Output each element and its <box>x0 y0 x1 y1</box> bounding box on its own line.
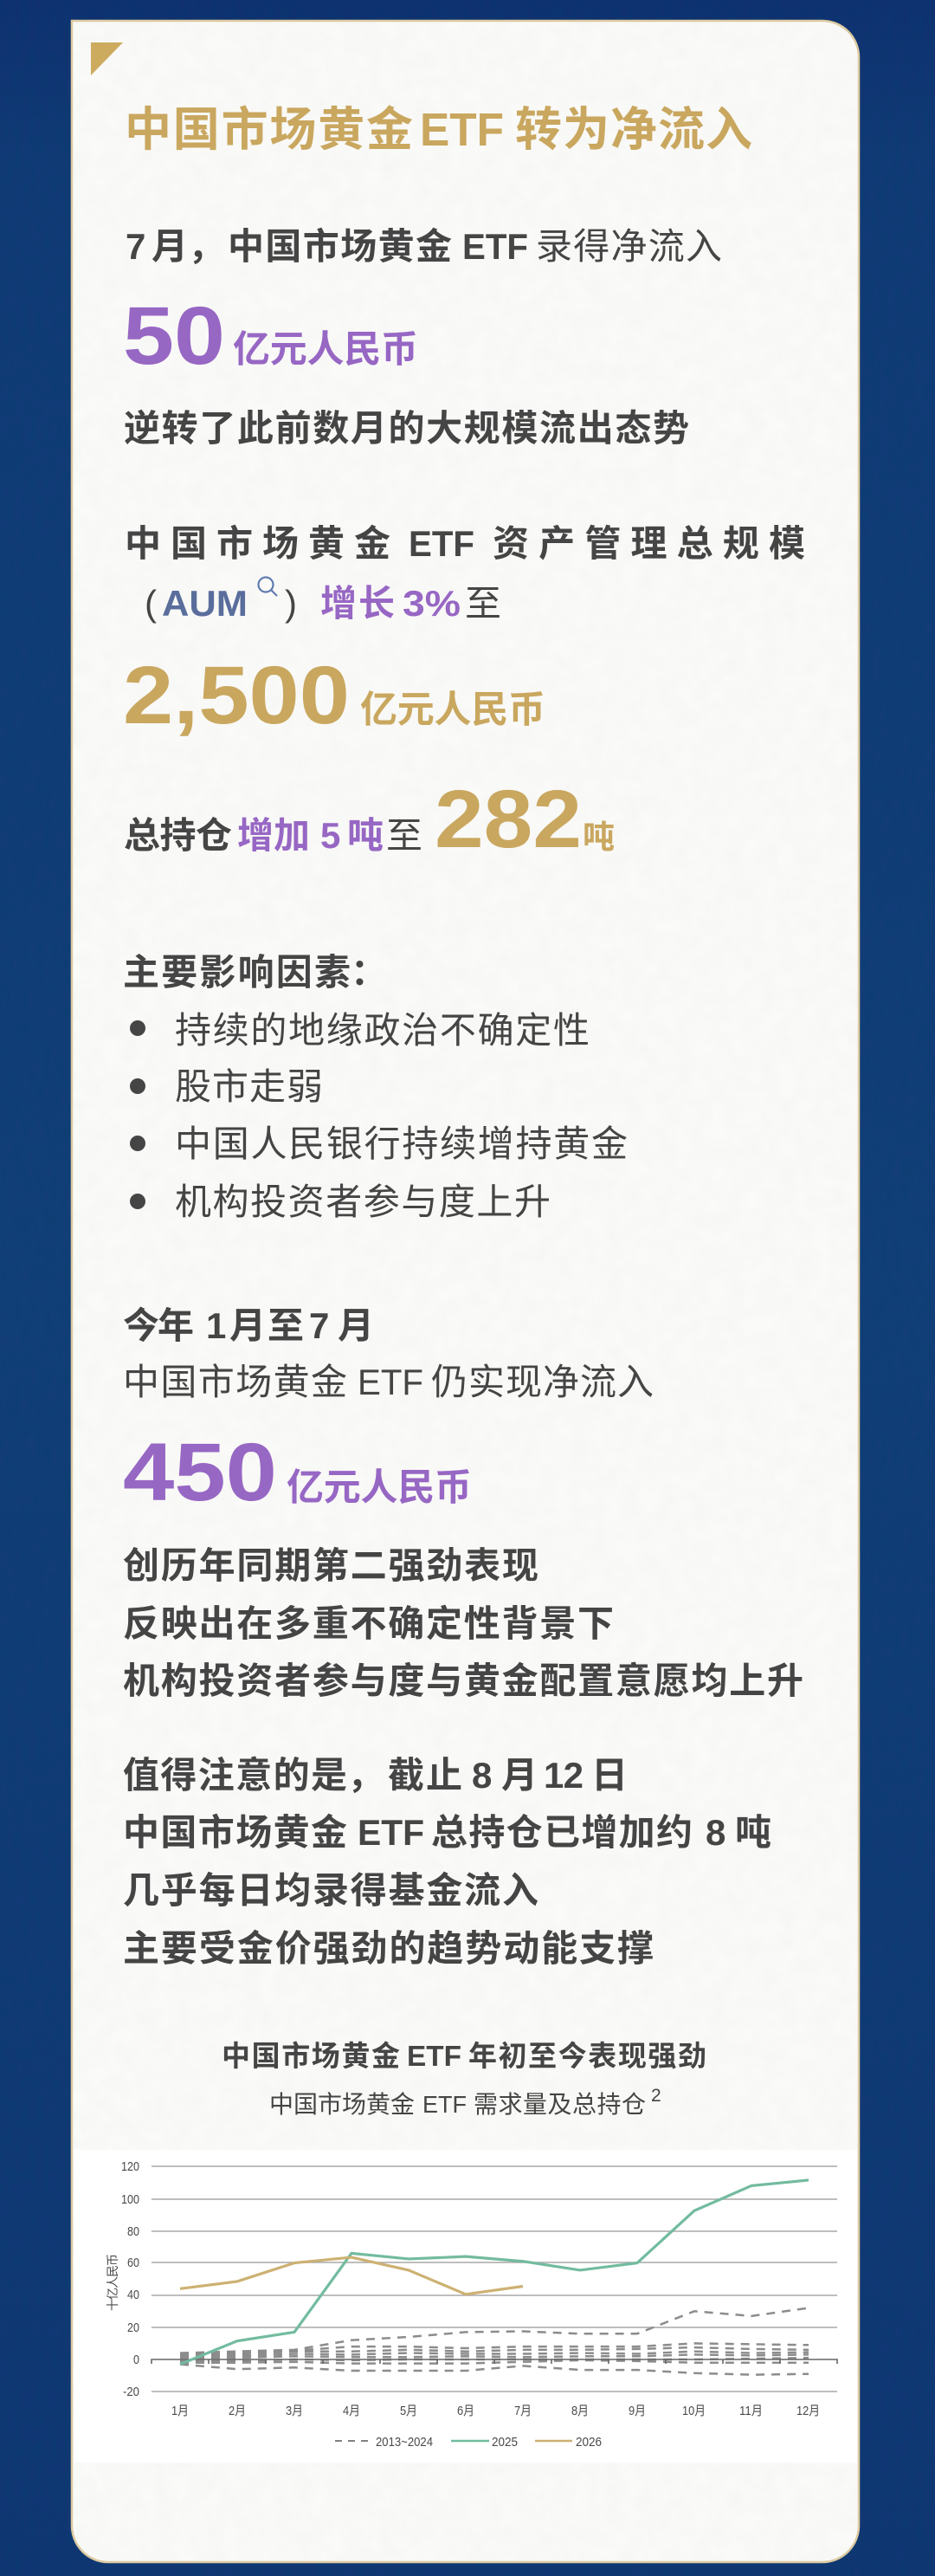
text block: AUM growth: ) <box>285 583 297 624</box>
text block: August note: 值得注意的是 <box>123 1755 347 1796</box>
legend: 2026 <box>576 2435 602 2450</box>
stat: 450 亿元人民币: 亿元人民币 <box>287 1467 472 1509</box>
legend: 2013~2024 <box>376 2435 433 2450</box>
stat: total holdings 282 tonnes: 总持仓 <box>124 815 232 856</box>
chart subtitle: ETF <box>422 2091 467 2118</box>
chart subtitle: 需求量及总持仓 <box>474 2091 646 2118</box>
x axis month labels: 7月 <box>514 2404 532 2418</box>
x axis month labels: 11月 <box>739 2404 763 2418</box>
text block: August note: 8 <box>706 1812 725 1853</box>
text block: key drivers heading: 主要影响因素 <box>123 952 351 993</box>
y axis labels: 40 <box>127 2288 139 2302</box>
x axis month labels: 8月 <box>571 2404 589 2418</box>
chart subtitle: 中国市场黄金 <box>269 2091 415 2118</box>
chart title <box>222 2040 706 2072</box>
stat: total holdings 282 tonnes <box>124 773 615 865</box>
y axis title: 十亿人民币 <box>106 2254 119 2311</box>
text block: January to July <box>123 1305 654 1402</box>
stat: 450 亿元人民币: 450 <box>123 1427 277 1518</box>
x axis month labels: 1月 <box>171 2404 189 2418</box>
zero axis with ticks <box>152 2359 837 2364</box>
stat: total holdings 282 tonnes: 增加 <box>237 815 310 856</box>
text block: January to July: 7 <box>309 1305 329 1346</box>
text block: January to July: 月至 <box>229 1305 304 1346</box>
y axis labels: 0 <box>133 2353 139 2367</box>
text block: August note: 中国市场黄金 <box>123 1812 347 1853</box>
y axis labels: -20 <box>123 2385 139 2399</box>
y axis labels: 120 <box>121 2159 139 2174</box>
y axis labels: 20 <box>127 2320 139 2335</box>
text block: second strongest: 创历年同期第二强劲表现 <box>123 1545 538 1586</box>
stat: total holdings 282 tonnes: 282 <box>435 773 582 865</box>
chart: China gold ETF demand line chart <box>74 2150 857 2463</box>
y axis gridlines <box>152 2166 837 2392</box>
text block: AUM growth: ETF <box>409 523 474 564</box>
chart title: 中国市场黄金 <box>222 2040 400 2072</box>
title: 转为净流入 <box>515 104 752 156</box>
icon: gold corner triangle <box>91 42 123 75</box>
text block: July net inflow lead: 中国市场黄金 <box>228 226 452 267</box>
x axis month labels <box>171 2404 820 2418</box>
text block: AUM growth: 3% <box>403 583 461 624</box>
x axis month labels: 4月 <box>343 2404 360 2418</box>
text block: August note: 12 <box>544 1755 584 1796</box>
chart title: 年初至今表现强劲 <box>468 2040 706 2072</box>
stat: total holdings 282 tonnes: 5 <box>320 815 340 856</box>
x axis month labels: 5月 <box>400 2404 417 2418</box>
text block: AUM growth: AUM <box>162 583 248 624</box>
text block: August note: 吨 <box>735 1812 771 1853</box>
text block: second strongest: 反映出在多重不确定性背景下 <box>123 1603 614 1644</box>
x axis month labels: 2月 <box>229 2404 246 2418</box>
text block: July net inflow lead: ， <box>188 226 224 267</box>
text block: second strongest: 机构投资者参与度与黄金配置意愿均上升 <box>123 1660 803 1701</box>
series: 2026 line <box>180 2257 523 2294</box>
title <box>125 104 752 156</box>
text block: AUM growth <box>125 523 805 624</box>
stat: 50 亿元人民币: 50 <box>123 290 225 382</box>
text block: AUM growth: 至 <box>465 583 501 624</box>
stat: 50 亿元人民币: 亿元人民币 <box>233 329 418 371</box>
list item 4: 机构投资者参与度上升 <box>175 1181 551 1222</box>
chart subtitle: 2 <box>651 2086 661 2106</box>
text block: key drivers heading: ： <box>351 952 387 993</box>
text block: August note: 总持仓已增加约 <box>431 1812 693 1853</box>
text block: reversal of outflows: 逆转了此前数月的大规模流出态势 <box>124 408 689 449</box>
text block: AUM growth: ( <box>145 583 157 624</box>
stat: 2,500 亿元人民币: 2,500 <box>123 650 350 741</box>
list item 1: 持续的地缘政治不确定性 <box>175 1010 590 1051</box>
y axis labels: 80 <box>127 2224 139 2239</box>
list item 3: 中国人民银行持续增持黄金 <box>175 1123 628 1164</box>
stat: total holdings 282 tonnes: 至 <box>386 815 422 856</box>
text block: July net inflow lead <box>126 226 722 267</box>
text block: AUM growth: 中国市场黄金 <box>125 523 390 564</box>
title: 中国市场黄金 <box>125 104 413 156</box>
y axis labels <box>121 2159 139 2399</box>
stat: 2,500 亿元人民币 <box>123 650 545 741</box>
text block: August note: 日 <box>591 1755 628 1796</box>
stat: total holdings 282 tonnes: 吨 <box>347 815 384 856</box>
text block: July net inflow lead: ETF <box>462 226 528 267</box>
x axis month labels: 3月 <box>286 2404 303 2418</box>
stat: total holdings 282 tonnes: 吨 <box>583 819 615 855</box>
stat: 50 亿元人民币 <box>123 290 418 382</box>
text block: January to July: 月 <box>338 1305 374 1346</box>
text block: July net inflow lead: 7 <box>126 226 145 267</box>
text block: August note: ETF <box>358 1812 424 1853</box>
list item 2: 股市走弱 <box>175 1066 323 1107</box>
series: 2025 line <box>180 2180 809 2365</box>
icon: magnifier <box>258 577 277 596</box>
x axis month labels: 9月 <box>629 2404 646 2418</box>
text block: August note: 月 <box>501 1755 538 1796</box>
text block: August note: 8 <box>472 1755 492 1796</box>
stat: 450 亿元人民币 <box>123 1427 472 1518</box>
text block: August note: 截止 <box>388 1755 462 1796</box>
text block: January to July: 仍实现净流入 <box>431 1362 654 1402</box>
text block: August note <box>123 1755 771 1969</box>
x axis month labels: 6月 <box>457 2404 474 2418</box>
x axis month labels: 10月 <box>682 2404 706 2418</box>
legend: 2025 <box>492 2435 518 2450</box>
chart subtitle <box>269 2086 661 2118</box>
text block: AUM growth: 资产管理总规模 <box>493 523 805 564</box>
list: key drivers <box>130 1010 628 1222</box>
series: 2013-2024 dashed lines <box>180 2308 809 2375</box>
text block: second strongest <box>123 1545 803 1701</box>
text block: January to July: 1 <box>206 1305 226 1346</box>
text block: July net inflow lead: 录得净流入 <box>536 226 722 267</box>
text block: January to July: 今年 <box>123 1305 194 1346</box>
legend <box>335 2435 602 2450</box>
text block: August note: 主要受金价强劲的趋势动能支撑 <box>123 1928 654 1969</box>
x axis month labels: 12月 <box>796 2404 820 2418</box>
text block: January to July: ETF <box>358 1362 423 1402</box>
chart title: ETF <box>407 2040 461 2072</box>
title: ETF <box>420 104 504 156</box>
text block: January to July: 中国市场黄金 <box>123 1362 347 1402</box>
text block: AUM growth: 增长 <box>320 583 395 624</box>
text block: August note: ， <box>347 1755 384 1796</box>
y axis labels: 60 <box>127 2256 139 2270</box>
text block: August note: 几乎每日均录得基金流入 <box>123 1870 538 1911</box>
y axis labels: 100 <box>121 2192 139 2207</box>
stat: 2,500 亿元人民币: 亿元人民币 <box>360 689 545 731</box>
text block: July net inflow lead: 月 <box>152 226 188 267</box>
